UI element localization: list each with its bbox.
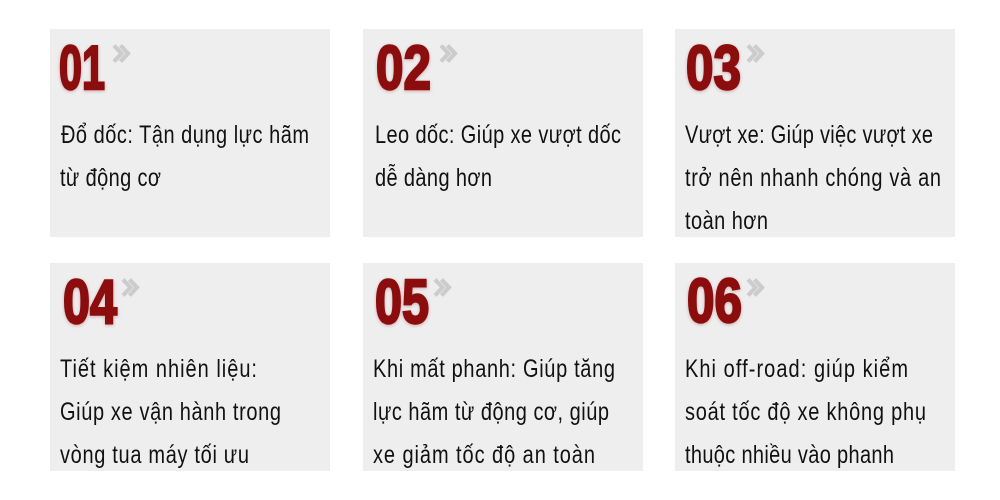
panel: card 03 xyxy=(675,29,955,237)
text block 05: Khi mất phanh: Giúp tăng xyxy=(373,355,615,383)
text block 04: Giúp xe vận hành trong xyxy=(60,398,281,426)
text block 02: dễ dàng hơn xyxy=(375,164,492,192)
icon: chevrons 05 xyxy=(435,280,449,296)
text block 06: Khi off-road: giúp kiểm xyxy=(685,355,908,383)
number 04: 04 xyxy=(63,268,117,337)
text block 03: Vượt xe: Giúp việc vượt xe xyxy=(685,121,933,149)
text block 06: soát tốc độ xe không phụ xyxy=(685,398,926,426)
text block 02 xyxy=(375,121,621,192)
text block 05: lực hãm từ động cơ, giúp xyxy=(373,398,609,426)
text block 03: toàn hơn xyxy=(685,207,768,235)
icon: chevrons 03 xyxy=(748,46,762,62)
number 05: 05 xyxy=(375,268,429,337)
panel: card 02 xyxy=(363,29,643,237)
number 01: 01 xyxy=(59,34,105,103)
text block 01: từ động cơ xyxy=(60,164,161,192)
panel: card 06 xyxy=(675,263,955,471)
text block 04 xyxy=(60,355,281,469)
text block 01 xyxy=(60,121,309,192)
icon: chevrons 04 xyxy=(123,280,137,296)
text block 06 xyxy=(685,355,926,469)
text block 04: vòng tua máy tối ưu xyxy=(60,441,249,469)
text block 05: xe giảm tốc độ an toàn xyxy=(373,441,595,469)
text block 03: trở nên nhanh chóng và an xyxy=(685,164,941,192)
panel: card 04 xyxy=(50,263,330,471)
text block 02: Leo dốc: Giúp xe vượt dốc xyxy=(375,121,621,149)
text block 04: Tiết kiệm nhiên liệu: xyxy=(60,355,257,383)
panel: card 01 xyxy=(50,29,330,237)
icon: chevrons 06 xyxy=(748,280,762,296)
number 02: 02 xyxy=(376,34,431,103)
icon: chevrons 01 xyxy=(114,46,128,62)
icon: chevrons 02 xyxy=(441,46,455,62)
text block 03 xyxy=(685,121,941,235)
number 03: 03 xyxy=(686,34,741,103)
panel: card 05 xyxy=(363,263,643,471)
text block 06: thuộc nhiều vào phanh xyxy=(685,441,894,469)
number 06: 06 xyxy=(687,267,742,336)
text block 05 xyxy=(373,355,615,469)
text block 01: Đổ dốc: Tận dụng lực hãm xyxy=(61,121,309,149)
